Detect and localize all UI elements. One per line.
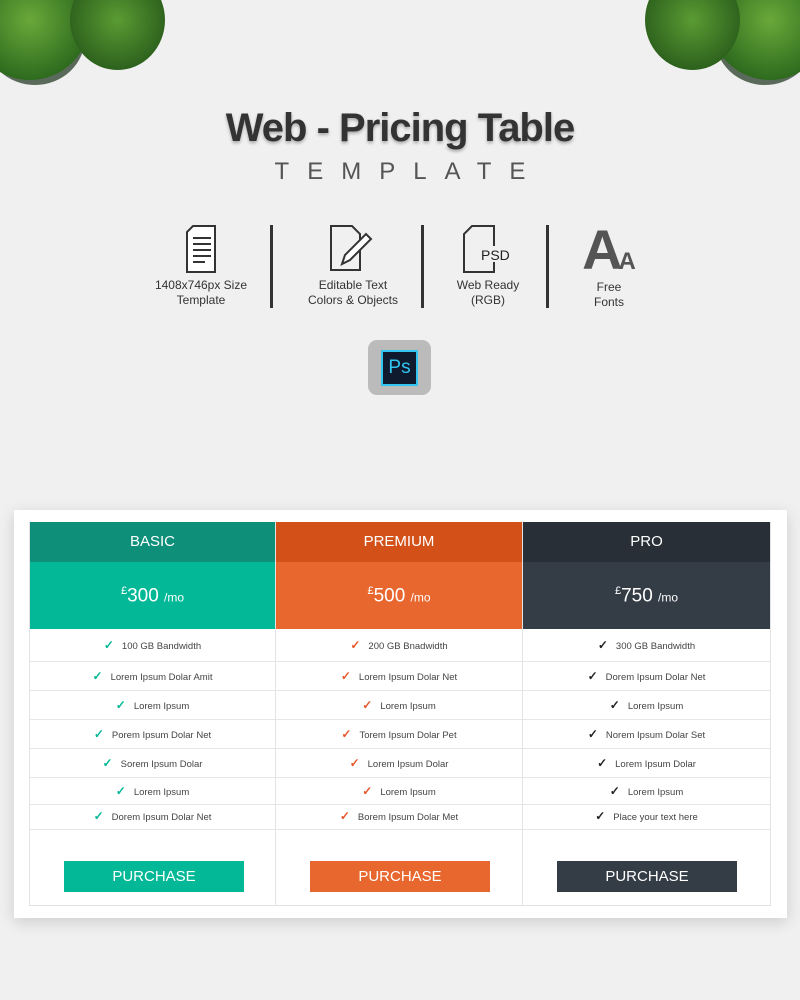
column: pro: ✓ Dorem Ipsum Dolar Net bbox=[588, 669, 705, 683]
column: premium: ✓ Torem Ipsum Dolar Pet bbox=[341, 727, 457, 741]
title: Web - Pricing Table bbox=[226, 106, 574, 150]
column: basic: ✓ Lorem Ipsum Dolar Amit bbox=[93, 669, 212, 683]
column: pro: PRO bbox=[630, 533, 663, 550]
column: premium: ✓ Lorem Ipsum Dolar bbox=[350, 756, 448, 770]
column: premium: PURCHASE bbox=[358, 868, 442, 885]
column: pro: ✓ Lorem Ipsum bbox=[610, 698, 683, 712]
feature: psd: Web Ready bbox=[457, 278, 519, 292]
column: basic: ✓ Sorem Ipsum Dolar bbox=[103, 756, 202, 770]
column: premium: ✓ Borem Ipsum Dolar Met bbox=[340, 809, 458, 823]
table bottom border bbox=[29, 905, 771, 906]
feature: size: 1408x746px Size bbox=[155, 278, 247, 292]
feature: size bbox=[155, 225, 247, 307]
column: premium bbox=[276, 522, 523, 905]
column: basic: ✓ 100 GB Bandwidth bbox=[104, 638, 201, 652]
pricing card bbox=[14, 510, 787, 918]
column: pro: ✓ Place your text here bbox=[595, 809, 698, 823]
subtitle: TEMPLATE bbox=[275, 158, 543, 185]
column: pro bbox=[523, 522, 771, 905]
feature: psd: PSD bbox=[481, 247, 510, 263]
column: premium: ✓ Lorem Ipsum bbox=[362, 698, 436, 712]
column: premium: ✓ Lorem Ipsum Dolar Net bbox=[341, 669, 457, 683]
icon: photoshop bbox=[368, 340, 431, 395]
feature: fonts: AA bbox=[582, 218, 636, 281]
column: basic: ✓ Porem Ipsum Dolar Net bbox=[94, 727, 211, 741]
feature: psd: (RGB) bbox=[471, 293, 505, 307]
feature: editable: Colors & Objects bbox=[308, 293, 398, 307]
column: premium: ✓ Lorem Ipsum bbox=[362, 784, 436, 798]
feature: editable bbox=[308, 225, 398, 307]
feature: psd bbox=[456, 225, 520, 307]
plant top-left bbox=[0, 0, 165, 85]
column: basic: BASIC bbox=[130, 533, 175, 550]
column: pro: ✓ 300 GB Bandwidth bbox=[598, 638, 695, 652]
column: pro: ✓ Norem Ipsum Dolar Set bbox=[588, 727, 705, 741]
column: premium: £500 /mo bbox=[367, 585, 431, 606]
divider bbox=[546, 225, 549, 308]
icon: photoshop: Ps bbox=[388, 357, 411, 378]
feature: fonts bbox=[582, 218, 636, 309]
column: basic: PURCHASE bbox=[112, 868, 196, 885]
column: pro: ✓ Lorem Ipsum bbox=[610, 784, 683, 798]
column: basic: £300 /mo bbox=[121, 585, 184, 606]
column: pro: £750 /mo bbox=[615, 585, 678, 606]
feature: fonts: Fonts bbox=[594, 295, 624, 309]
column: pro: PURCHASE bbox=[605, 868, 689, 885]
divider bbox=[270, 225, 273, 308]
feature: fonts: Free bbox=[597, 280, 621, 294]
column: pro: ✓ Lorem Ipsum Dolar bbox=[597, 756, 696, 770]
column: basic: ✓ Lorem Ipsum bbox=[116, 698, 189, 712]
column: basic bbox=[29, 522, 276, 905]
divider bbox=[421, 225, 424, 308]
column: basic: ✓ Dorem Ipsum Dolar Net bbox=[94, 809, 211, 823]
feature: size: Template bbox=[177, 293, 225, 307]
feature: editable: Editable Text bbox=[319, 278, 387, 292]
plant top-right bbox=[645, 0, 800, 85]
column: premium: ✓ 200 GB Bnadwidth bbox=[350, 638, 448, 652]
column: premium: PREMIUM bbox=[364, 533, 434, 550]
column: basic: ✓ Lorem Ipsum bbox=[116, 784, 189, 798]
